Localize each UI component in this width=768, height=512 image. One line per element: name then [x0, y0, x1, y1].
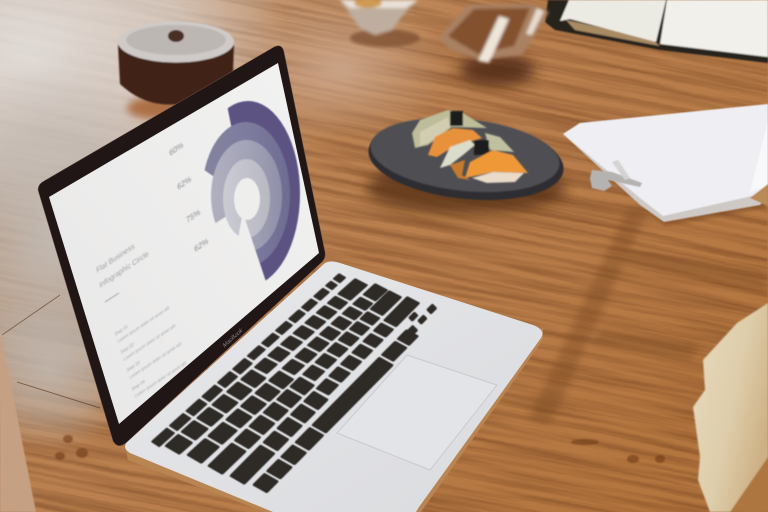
heading: Flat Business — [96, 241, 135, 275]
bowl at top — [340, 0, 420, 47]
step list: Step 04 — [131, 378, 146, 392]
notebook, top right — [545, 0, 768, 63]
chart centre — [234, 178, 260, 220]
heading rule — [105, 293, 119, 302]
key row 6, near half with space bar — [252, 356, 394, 494]
key row 5, near half — [229, 390, 329, 485]
screen — [49, 63, 319, 424]
laptop deck — [125, 262, 542, 512]
step list: Lorem ipsum dolor sit amet elit — [117, 304, 170, 344]
laptop base underside — [125, 328, 543, 512]
infographic on screen — [96, 101, 300, 399]
table edge plank — [0, 335, 36, 512]
percent labels — [169, 140, 209, 254]
laptop lid with bezel — [38, 46, 325, 446]
percent labels: 62% — [194, 236, 209, 254]
sushi pieces — [412, 110, 528, 183]
key row 5, far half — [315, 296, 420, 396]
key row 4, far half — [302, 290, 402, 381]
step list — [114, 304, 187, 399]
key row 1, far half — [246, 273, 346, 361]
step list: Lorem ipsum dolor sit amet elit — [123, 322, 176, 362]
plank seams — [2, 295, 100, 408]
step list: Step 03 — [126, 359, 141, 373]
key row 2, far half — [253, 278, 368, 374]
clipboard with paper — [563, 104, 768, 226]
cloth, bottom right — [693, 303, 768, 512]
step list: Lorem ipsum dolor sit amet elit — [134, 359, 187, 399]
laptop — [38, 46, 543, 512]
percent labels: 60% — [169, 140, 184, 158]
key row 1, near half — [151, 358, 253, 447]
wooden tray shadow — [459, 54, 535, 86]
chart: ring diagram — [196, 101, 300, 286]
key row 3, far half — [281, 283, 388, 375]
trackpad — [337, 355, 497, 470]
logo on bezel: MacBook — [223, 327, 243, 350]
key row 3, near half — [186, 370, 295, 464]
key row 4, near half — [207, 376, 315, 475]
step list: Lorem ipsum dolor sit amet elit — [129, 340, 182, 380]
step list: Step 02 — [120, 341, 135, 355]
dark wood bands — [528, 208, 768, 425]
percent labels: 62% — [177, 174, 192, 192]
key row 6, far half — [381, 329, 419, 362]
heading — [96, 241, 149, 302]
wooden tray with chopsticks — [438, 4, 549, 63]
key row 2, near half — [164, 369, 267, 455]
plate with sushi — [364, 109, 568, 214]
keyboard — [151, 273, 437, 494]
step list: Step 01 — [114, 323, 129, 337]
heading: Infographic Circle — [99, 249, 149, 290]
knots — [55, 435, 665, 463]
icon: metal clip — [590, 160, 642, 191]
percent labels: 75% — [186, 207, 201, 225]
stacked coasters — [118, 22, 234, 119]
arrow keys — [406, 303, 437, 337]
